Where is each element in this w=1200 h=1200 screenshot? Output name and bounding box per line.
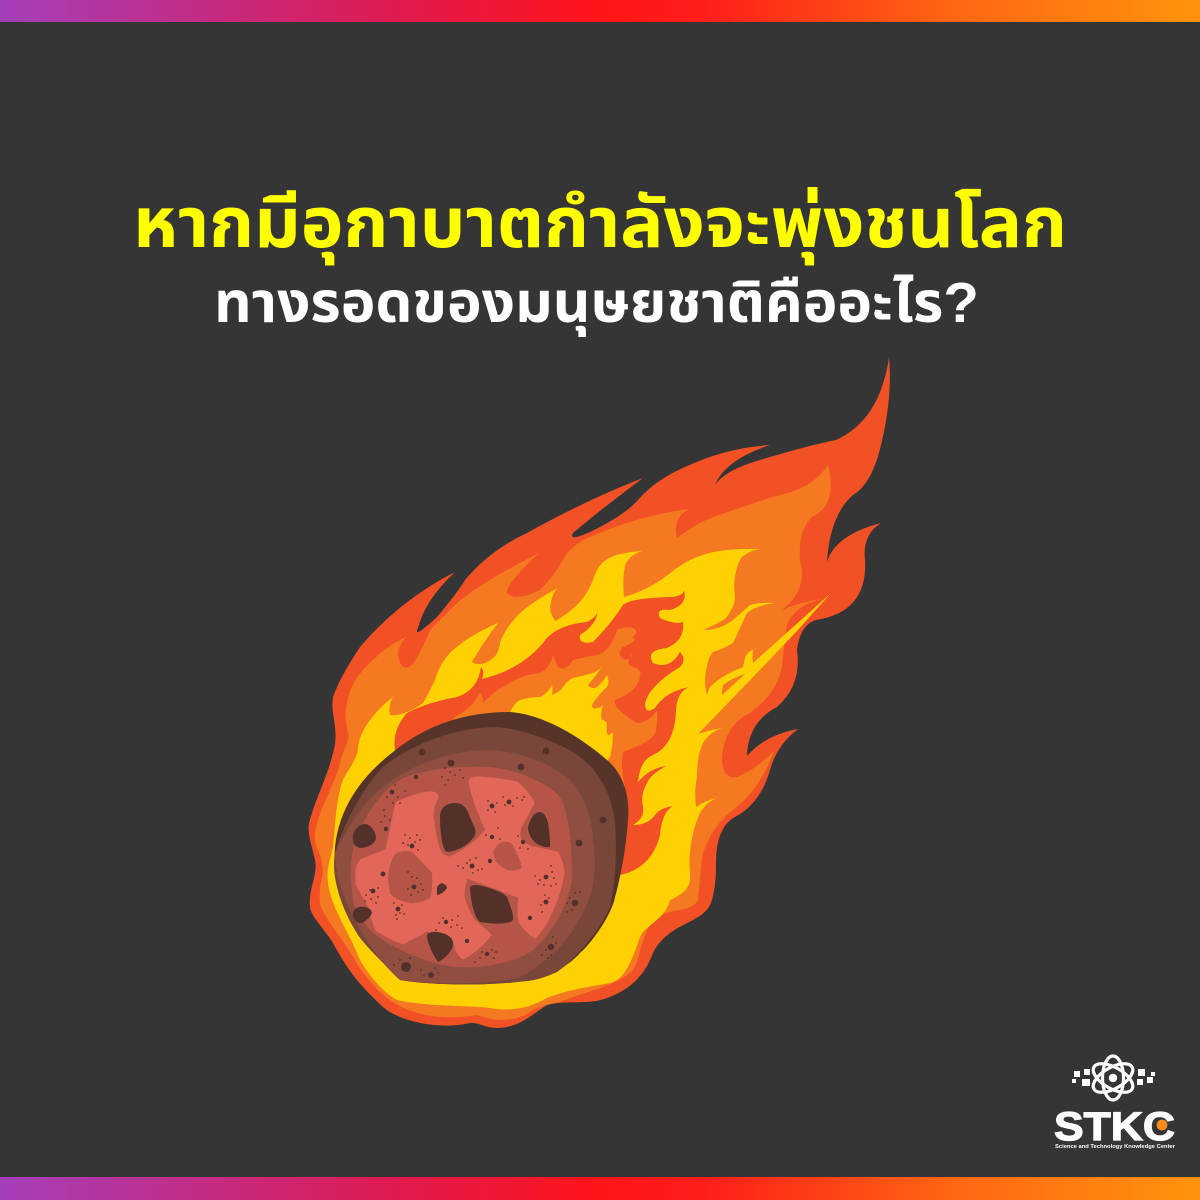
logo dot [1157, 1120, 1167, 1130]
logo tagline: Science and Technology Knowledge Center [1055, 1144, 1176, 1150]
rock: outer rim [335, 712, 628, 984]
rock: second band [334, 727, 616, 984]
logo: STKC [1054, 1056, 1176, 1150]
bottom gradient bar [0, 1177, 1200, 1200]
flame: orange sliver inside spike [722, 674, 745, 695]
rock: fourth band [351, 767, 572, 967]
rock: speckles [365, 768, 580, 975]
flame: inner red tongues [394, 590, 689, 875]
title line 1: หากมีอุกาบาตกำลังจะพุ่งชนโลก [133, 184, 1067, 265]
rock: dark holes [353, 803, 550, 962]
meteor rock [334, 712, 628, 984]
rock: large pits [371, 748, 606, 978]
rock: light crust [357, 778, 563, 958]
flame: orange layer [315, 465, 831, 1020]
rock: third band [335, 750, 595, 983]
logo wordmark: STKC [1054, 1105, 1175, 1149]
logo icon: pixel squares [1072, 1069, 1155, 1086]
logo icon: atom [1089, 1056, 1137, 1100]
flame: inner orange pocket [453, 627, 657, 800]
title line 2: ทางรอดของมนุษยชาติคืออะไร? [214, 271, 979, 337]
illustration: flaming meteor [309, 357, 890, 1028]
rock: crater pockets [388, 842, 522, 903]
flame: outer red layer [309, 357, 890, 1028]
flame: inner yellow above rock [510, 665, 613, 770]
top gradient bar [0, 0, 1200, 22]
flame: yellow layer [327, 549, 831, 1010]
title [133, 184, 1067, 337]
